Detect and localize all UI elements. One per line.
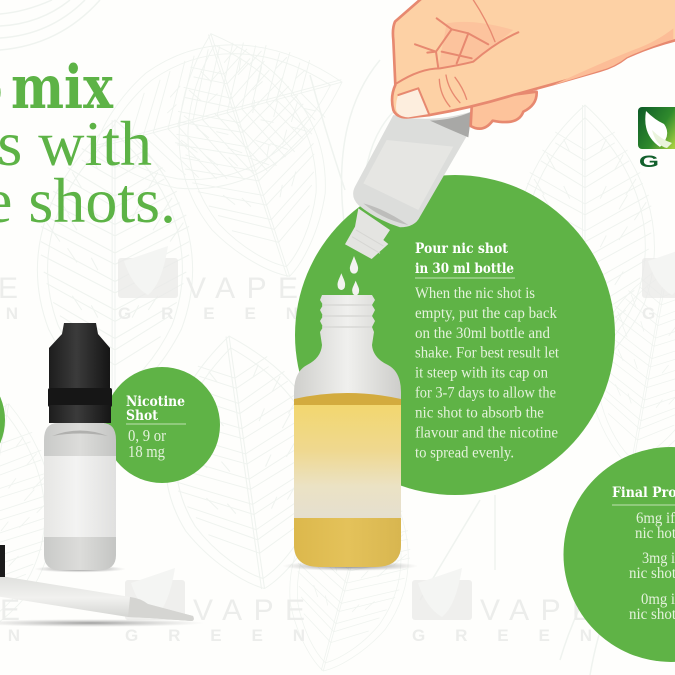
icon: top right logo: G [639,152,659,171]
icon: 30 ml bottle with liquid [282,295,418,571]
icon: top right logo [638,107,675,171]
body text: to spread evenly. [415,444,514,462]
title [0,53,176,236]
title: mix [11,53,114,123]
body text: flavour and the nicotine [415,424,558,442]
watermarks [0,246,675,645]
body text: shake. For best result let [415,344,560,362]
body text: When the nic shot is [415,285,535,302]
icon: drops [338,256,359,295]
panel: nicotine shot circle: Shot [126,408,159,424]
left circle edge [0,362,5,478]
icon: nicotine shot bottle [34,323,126,572]
body text: on the 30ml bottle and [415,325,550,342]
heading: pour nic shot: Pour nic shot [415,241,508,257]
body text: for 3-7 days to allow the [415,384,556,402]
body text: nic shot to absorb the [415,404,544,422]
icon: pouring bottle [345,112,472,259]
icon: dropper [0,545,205,627]
body text [415,285,560,462]
panel: pour nic shot circle [295,175,615,495]
icon: hand [392,0,675,129]
title: s with [0,108,152,179]
body text: empty, put the cap back [415,305,557,322]
heading: pour nic shot [415,241,515,278]
nail [396,88,429,117]
palm and thumb [392,0,675,117]
body text: it steep with its cap on [415,364,548,382]
panel: final product circle [564,447,675,662]
panel: nicotine shot circle: 0, 9 or [128,426,166,445]
heading: pour nic shot: in 30 ml bottle [415,261,514,277]
panel: nicotine shot circle: Nicotine [126,394,185,410]
panel: nicotine shot circle: 18 mg [128,442,165,461]
lower fingers [471,92,537,129]
panel: nicotine shot circle [104,367,220,483]
creases [397,0,518,114]
